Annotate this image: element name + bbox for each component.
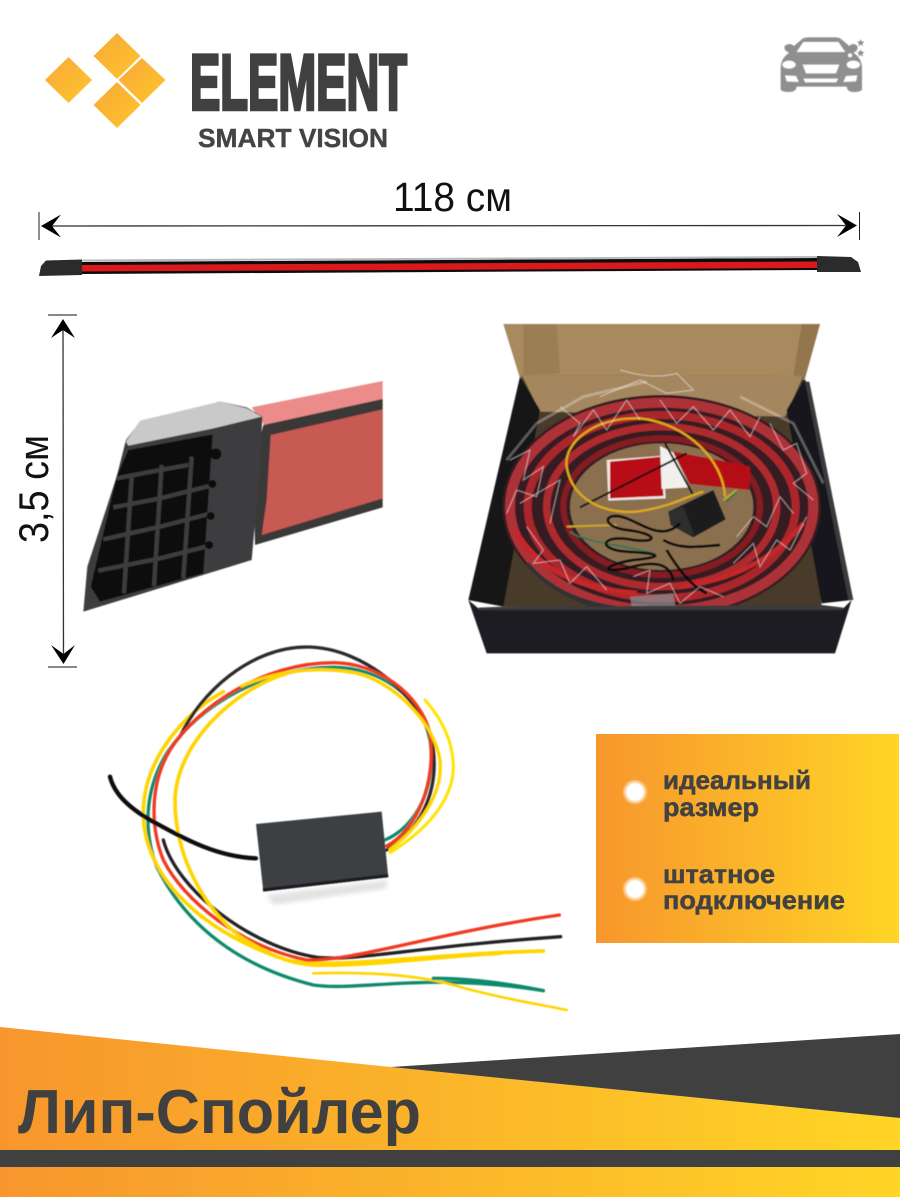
feature: ideal size (663, 765, 811, 822)
dimension arrow: length (39, 174, 860, 240)
photo: spoiler end profile (83, 381, 383, 612)
wire: red (154, 663, 559, 960)
control module (256, 812, 388, 892)
wire: inner yellow (242, 670, 440, 849)
title: Лип-Спойлер (18, 1078, 421, 1147)
panel: features (596, 734, 899, 943)
feature: standard connection: подключение (663, 885, 845, 915)
wire: outer yellow (143, 692, 543, 963)
label: 3,5 см: 3,5 см (10, 435, 57, 543)
plastic highlights (507, 370, 813, 603)
logo: ELEMENT Smart Vision (45, 33, 407, 153)
box lid (503, 324, 820, 378)
brand tagline: SMART VISION (198, 123, 388, 153)
coiled spoiler (502, 394, 822, 607)
box front (468, 600, 852, 653)
feature: standard connection: штатное (663, 859, 775, 889)
box inside (503, 375, 822, 607)
stickers (607, 456, 666, 501)
label: 118 см: 118 см (393, 174, 512, 220)
ties (580, 443, 693, 507)
wire: black (180, 647, 434, 850)
footer banner (0, 1027, 900, 1197)
black cables (606, 516, 720, 593)
photo: wiring module (110, 647, 567, 1010)
bullet (622, 779, 648, 805)
yellow wire loop (566, 418, 725, 512)
feature: ideal size: размер (663, 792, 759, 822)
icon: car with stars (781, 37, 864, 92)
control module (668, 490, 726, 537)
cardboard floor (562, 437, 762, 577)
spoiler strip (39, 256, 861, 276)
bullet (622, 876, 648, 902)
wire: green (148, 667, 543, 991)
wire: black cable (110, 777, 256, 858)
plastic wrap sheen (502, 396, 821, 606)
icon: logo diamonds (45, 33, 166, 128)
feature: standard connection (663, 859, 845, 915)
brand name: ELEMENT (190, 38, 407, 126)
feature: ideal size: идеальный (663, 765, 811, 795)
module shadow (267, 880, 387, 905)
photo: boxed kit (468, 324, 853, 653)
dimension arrow: height (10, 315, 77, 667)
